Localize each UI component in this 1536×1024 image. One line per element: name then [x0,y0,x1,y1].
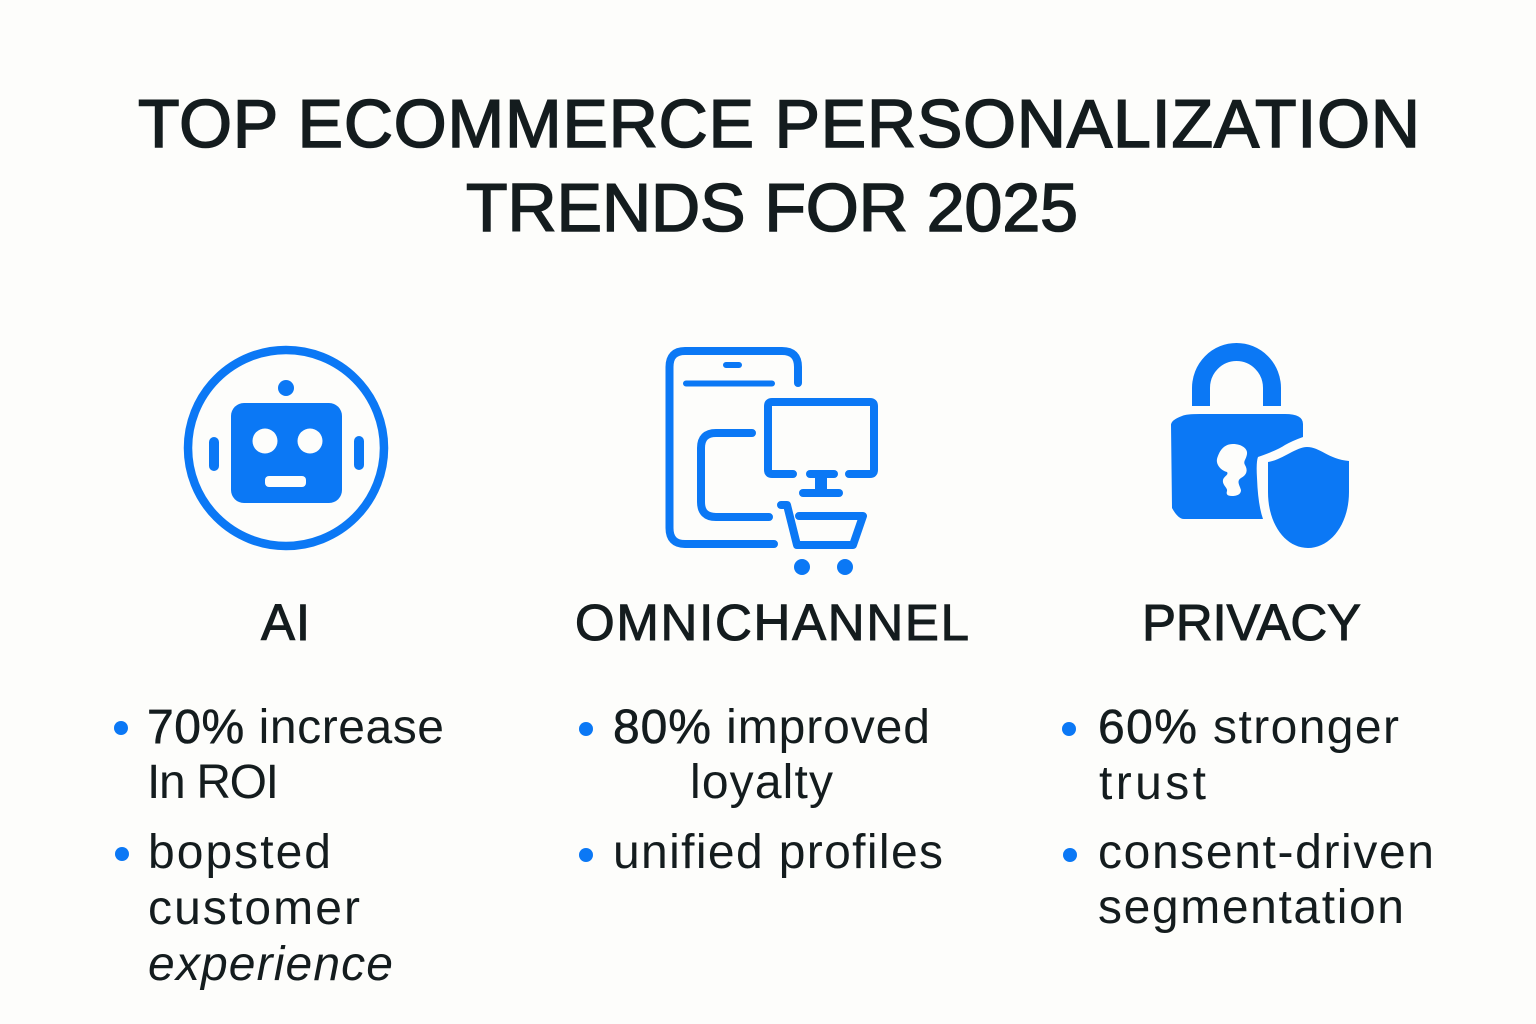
bullet list: Privacy: trust [1099,757,1206,810]
bullet list: AI: experience [148,938,393,991]
panel: Privacy [1062,352,1434,934]
heading: Omnichannel: OMNICHANNEL [575,594,969,651]
icon: padlock with shield [1171,352,1349,548]
icon: phone, monitor and shopping cart [670,351,874,575]
bullet list: AI [114,701,444,991]
bullet list: Privacy [1062,701,1434,934]
heading: AI: AI [261,594,310,651]
bullet list: Omnichannel: loyalty [690,756,833,809]
bullet list: Omnichannel: 80% improved [613,701,930,754]
heading: Privacy: PRIVACY [1142,594,1361,651]
title: TRENDS FOR 2025 [466,170,1078,246]
bullet list: Privacy: consent-driven [1098,826,1434,879]
bullet list: AI: In ROI [147,756,279,809]
bullet list: Privacy: 60% stronger [1098,701,1399,754]
bullet list: Omnichannel [579,701,943,879]
bullet list: Privacy: segmentation [1098,881,1404,934]
title: TOP ECOMMERCE PERSONALIZATION [138,86,1420,162]
icon: robot in a circle [188,350,384,546]
panel: AI [114,350,444,991]
bullet list: AI: bopsted [148,826,331,879]
title [138,86,1420,246]
panel: Omnichannel [575,351,969,879]
bullet list: Omnichannel: unified profiles [613,826,943,879]
bullet list: AI: customer [148,882,360,935]
bullet list: AI: 70% increase [147,701,444,754]
